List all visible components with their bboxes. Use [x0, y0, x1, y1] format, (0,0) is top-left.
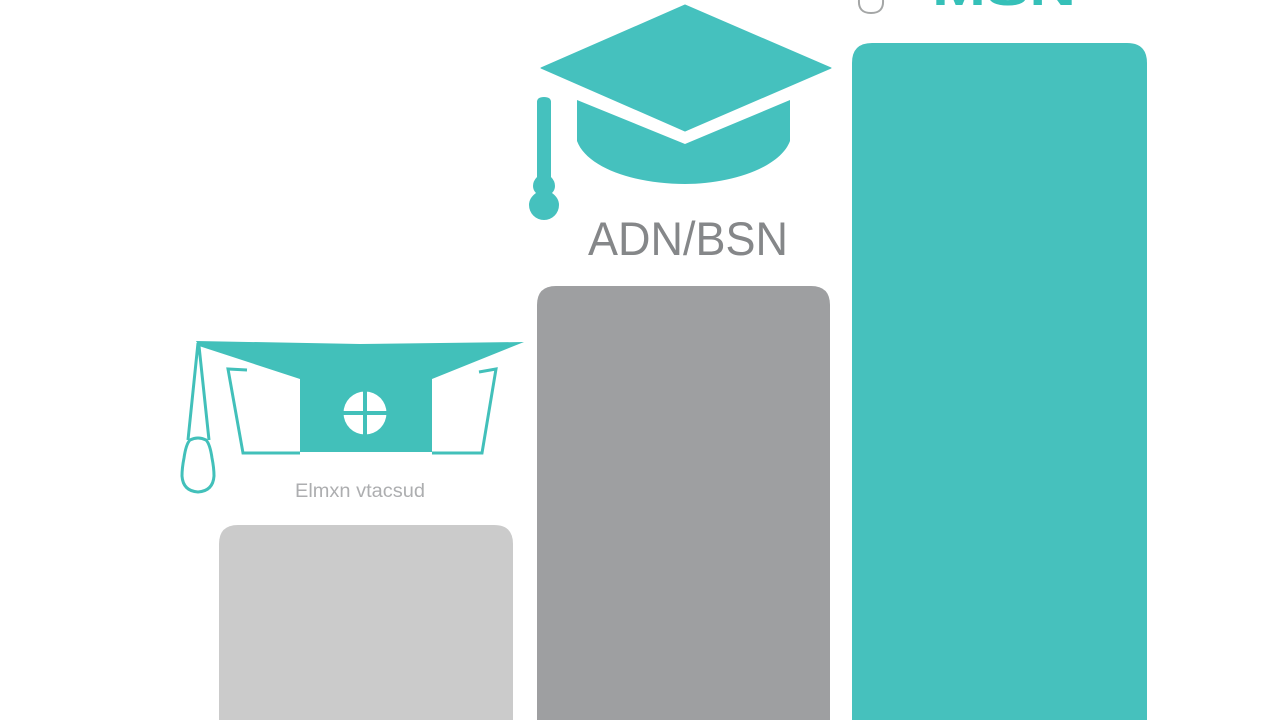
icon: MSN cap tassel (cropped) [859, 0, 883, 13]
label: ADN/BSN: ADN/BSN [588, 212, 788, 265]
bar: entry level (light grey) [219, 525, 513, 720]
bar: MSN (teal) [852, 43, 1147, 720]
label: entry level: Elmxn vtacsud [295, 481, 425, 502]
icon: ADN/BSN graduation cap [529, 5, 831, 220]
icon: entry level cap with cross [182, 341, 524, 492]
bar: ADN/BSN (mid grey) [537, 286, 830, 720]
